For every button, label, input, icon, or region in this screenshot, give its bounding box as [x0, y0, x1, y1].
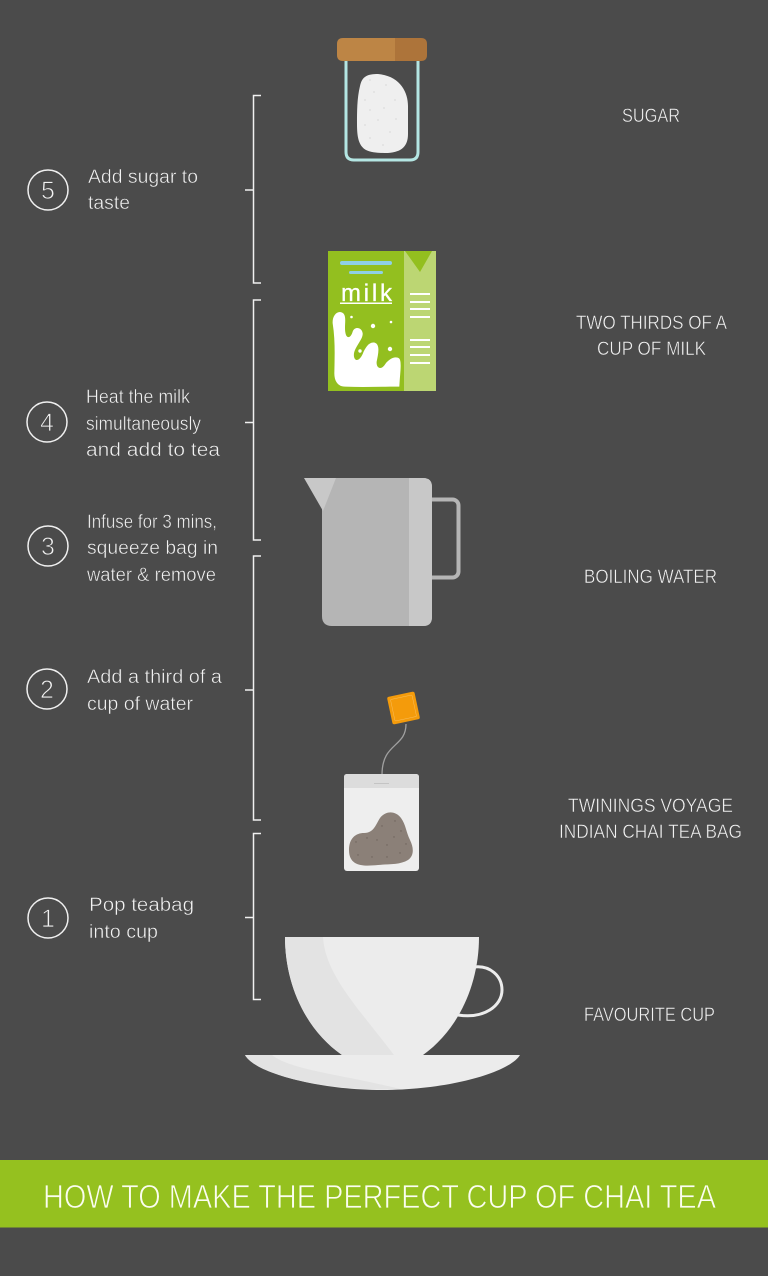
label: tea bag: TWININGS VOYAGE	[568, 796, 733, 817]
step 4: simultaneously	[86, 414, 201, 435]
step 3: squeeze bag in	[87, 538, 218, 559]
step 2: 2	[40, 676, 54, 704]
step 3	[28, 512, 218, 586]
step 1: into cup	[89, 922, 158, 943]
step 1: 1	[41, 905, 55, 933]
label: tea bag: INDIAN CHAI TEA BAG	[559, 822, 742, 843]
label: tea bag	[559, 796, 742, 843]
bracket: step 1	[245, 834, 261, 1000]
step 4: and add to tea	[86, 440, 220, 461]
title banner	[0, 1160, 768, 1228]
bracket: step 5	[245, 96, 261, 283]
step 4: Heat the milk	[86, 387, 190, 408]
label: boiling water: BOILING WATER	[584, 567, 717, 588]
icon: tea bag	[344, 691, 420, 871]
label: sugar: SUGAR	[622, 106, 680, 127]
icon: sugar jar	[337, 38, 427, 160]
label: milk: CUP OF MILK	[597, 339, 706, 360]
label: milk: TWO THIRDS OF A	[576, 313, 727, 334]
bracket: step 4	[245, 300, 261, 540]
label: cup: FAVOURITE CUP	[584, 1005, 715, 1026]
step 3: water & remove	[86, 565, 216, 586]
icon: water jug	[304, 478, 458, 626]
milk label: milk	[341, 280, 393, 307]
bracket: step 2 and 3	[245, 556, 261, 820]
step 5	[28, 167, 198, 214]
icon: milk carton	[328, 251, 436, 391]
step 2: cup of water	[87, 694, 194, 715]
step 2	[27, 667, 222, 715]
label: milk	[576, 313, 727, 360]
step 5: taste	[88, 193, 130, 214]
step 4	[27, 387, 220, 461]
step 5: 5	[41, 177, 55, 205]
step 3: 3	[41, 533, 55, 561]
step 2: Add a third of a	[87, 667, 222, 688]
step 3: Infuse for 3 mins,	[87, 512, 217, 533]
step 5: Add sugar to	[88, 167, 198, 188]
step 1	[28, 895, 194, 943]
step 1: Pop teabag	[89, 895, 194, 916]
step 4: 4	[40, 409, 54, 437]
icon: cup and saucer	[245, 937, 520, 1090]
